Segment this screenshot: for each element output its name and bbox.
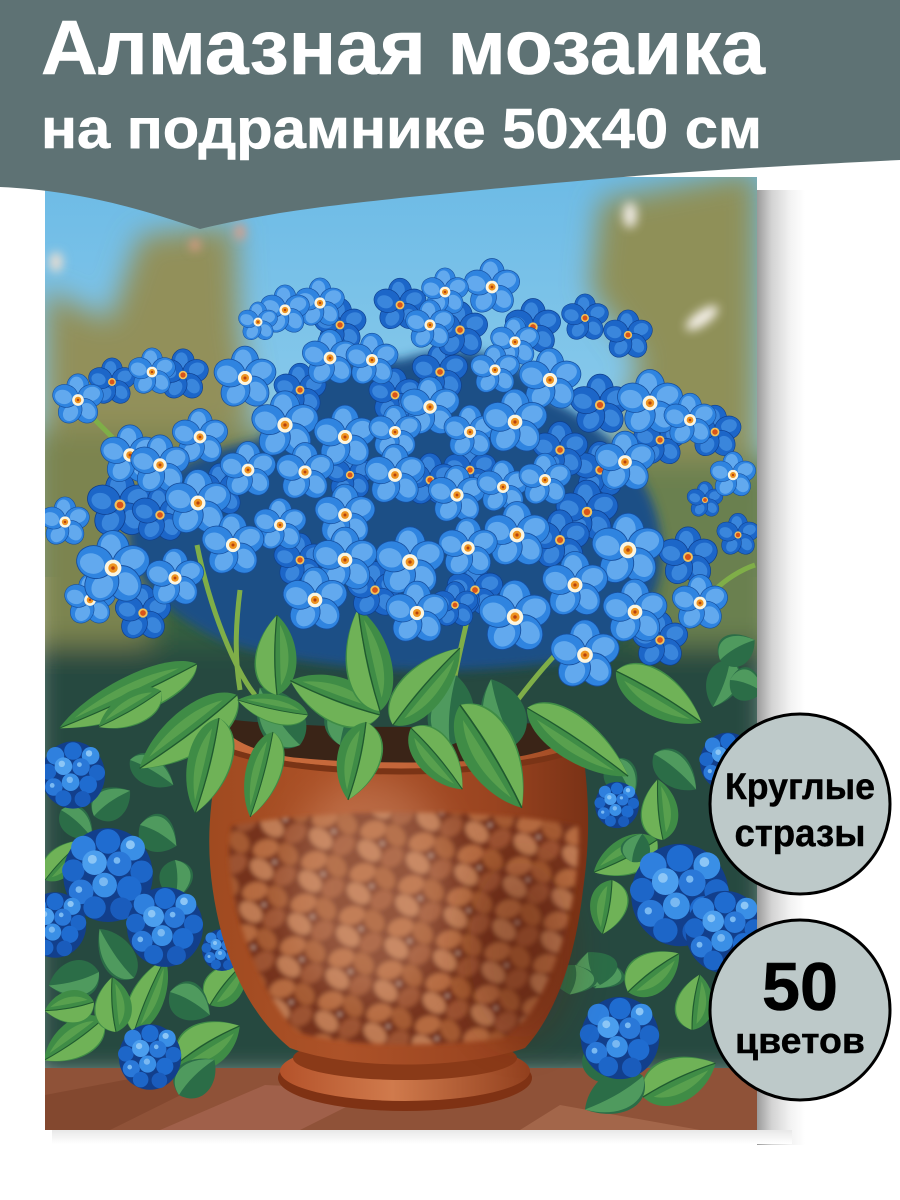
subtitle: на подрамнике 50х40 см: [41, 97, 762, 161]
title: Алмазная мозаика: [41, 5, 766, 91]
flower pot rim: [219, 718, 585, 774]
badge: round rhinestones: Круглые: [725, 766, 875, 807]
painting: [23, 170, 780, 1130]
badge: 50 colours: 50: [762, 949, 838, 1025]
background foliage: [30, 170, 780, 1080]
lower left foliage: [45, 753, 244, 1098]
flower pot saucer: [278, 1051, 532, 1111]
badge: 50 colours: [710, 920, 890, 1100]
hydrangeas: [23, 733, 764, 1090]
forget-me-not bouquet: [38, 259, 762, 692]
header banner: [0, 0, 900, 229]
badge: round rhinestones: [710, 714, 890, 894]
terracotta floor: [45, 1068, 757, 1130]
flower pot body: [209, 745, 588, 1064]
stems: [95, 420, 755, 710]
lower right foliage: [549, 624, 769, 1129]
blossoms in background: [49, 202, 722, 335]
sky: [45, 177, 757, 577]
plant leaves: [51, 604, 714, 822]
badge: 50 colours: цветов: [735, 1020, 865, 1061]
canvas shadow bottom: [52, 1130, 792, 1144]
canvas shadow right: [757, 190, 805, 1145]
badge: round rhinestones: стразы: [734, 813, 866, 855]
dark mass behind the bouquet: [128, 350, 662, 670]
